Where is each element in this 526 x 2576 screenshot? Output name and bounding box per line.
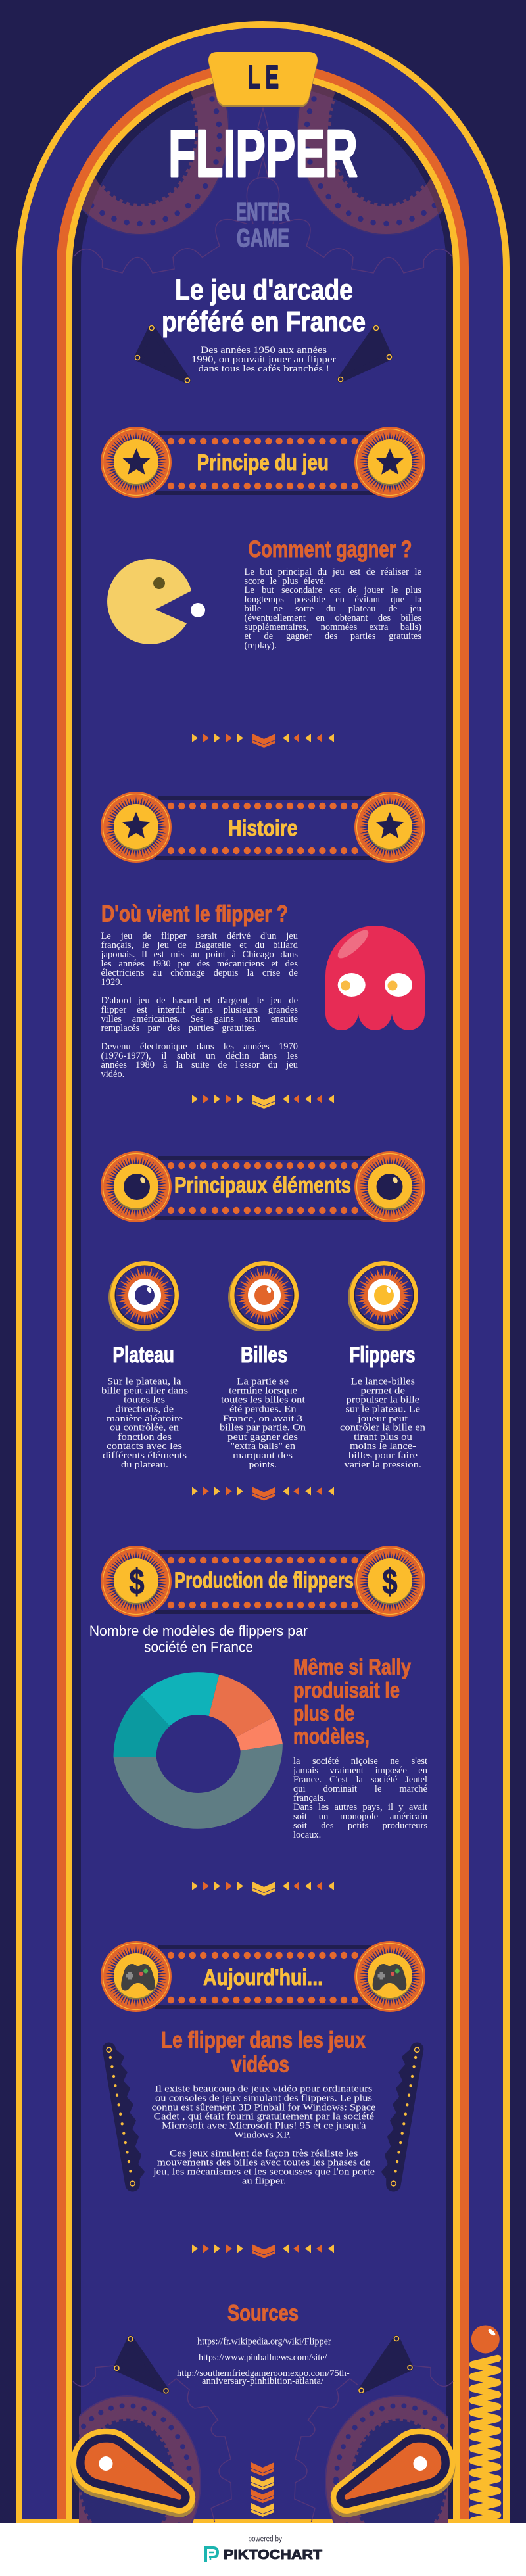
text: Billes: billes par partie. On [220, 1423, 306, 1433]
text: Comment gagner: Le but secondaire est de jouer le plus [245, 585, 421, 596]
text: Comment gagner: bille ne sorte du plateau de jeu [245, 604, 421, 614]
bottom chevrons [251, 2462, 274, 2517]
text: Rally: soit un monopole américain [293, 1811, 427, 1822]
text: Flippers: sur le plateau. Le [346, 1404, 420, 1415]
heading: Le flipper dans les jeux vidéos: vidéos [231, 2052, 289, 2078]
icon: dollar right: $ [383, 1562, 397, 1602]
text: Flippers: Le lance-billes [351, 1377, 415, 1387]
text: Billes: "extra balls" en [230, 1441, 296, 1452]
icon: pacman [107, 559, 205, 644]
text: Billes: toutes les billes ont [221, 1395, 305, 1406]
text: Plateau: directions, de [116, 1404, 174, 1415]
enter game label: GAME [237, 224, 289, 252]
heading: Même si Rally [293, 1655, 412, 1748]
footer background [0, 2523, 526, 2576]
text: D'où vient le flipper: les années 1930 par des mécaniciens et des [101, 959, 298, 969]
divider 4 [192, 1882, 334, 1896]
plaque: LE: L E [248, 60, 279, 95]
heading: Le flipper dans les jeux vidéos [161, 2027, 366, 2078]
bottom gear decoration [72, 2365, 454, 2523]
banner: Principe du jeu [101, 427, 425, 498]
text: Flippers: varier la pression. [345, 1460, 421, 1470]
chart title [89, 1623, 308, 1656]
subtitle: Le jeu d'arcade [175, 274, 353, 306]
text: Plateau: toutes les [124, 1395, 165, 1406]
heading: Comment gagner: Comment gagner ? [249, 537, 412, 562]
text: Billes: France, on avait 3 [223, 1414, 302, 1424]
text: D'où vient le flipper: remplacés par des parties gratuites. [101, 1023, 257, 1034]
banner title: Principaux éléments [174, 1173, 351, 1198]
donut chart [113, 1672, 283, 1829]
text: Rally [293, 1756, 427, 1840]
heading: Même si Rally: plus de [293, 1701, 354, 1725]
text: Flippers: moins le lance- [350, 1441, 416, 1452]
bumper: top right [338, 326, 392, 381]
text: Flippers: tirant plus ou [354, 1432, 412, 1443]
bumper: bottom right [359, 2337, 412, 2393]
banner title: Principe du jeu [197, 450, 329, 475]
text: Rally: soit des petits producteurs [293, 1821, 427, 1831]
source links [177, 2337, 350, 2387]
text: D'où vient le flipper: 1929. [101, 977, 122, 988]
text: Plateau: différents éléments [103, 1450, 187, 1461]
heading: Sources: Sources [227, 2301, 299, 2326]
text: Billes: marquant des [233, 1450, 293, 1461]
text: D'où vient le flipper: années 1980 à la suite de l'essor du jeu [101, 1060, 298, 1070]
text: jeux vidéo: Ces jeux simulent de façon très réaliste les [170, 2149, 358, 2159]
text: Rally: France. C'est la société Jeutel [293, 1775, 427, 1785]
text: Comment gagner: longtemps possible en évitant que la [245, 594, 421, 605]
text: Rally: français. [293, 1793, 326, 1803]
text: Plateau: fonction des [118, 1432, 172, 1443]
intro text: 1990, on pouvait jouer au flipper [191, 354, 336, 365]
banner title: Production de flippers [174, 1568, 354, 1593]
text: Billes: points. [249, 1460, 277, 1470]
source links: anniversary-pinhibition-atlanta/ [202, 2376, 324, 2387]
text: Plateau: du plateau. [121, 1460, 168, 1470]
source links: https://www.pinballnews.com/site/ [199, 2352, 327, 2363]
logo: piktochart: PIKTOCHART [224, 2547, 323, 2562]
text: Billes: La partie se [237, 1377, 289, 1387]
text: Plateau: contacts avec les [107, 1441, 182, 1452]
text: D'où vient le flipper: électriciens au chômage depuis la crise de [101, 968, 298, 978]
powered by: powered by [249, 2534, 282, 2544]
heading: Même si Rally: produisait le [293, 1678, 400, 1702]
divider 1 [192, 734, 334, 748]
text: Rally: locaux. [293, 1830, 321, 1840]
text: jeux vidéo: Il existe beaucoup de jeux vidéo pour ordinateurs [155, 2084, 373, 2095]
chart title: société en France [144, 1639, 253, 1656]
heading: Même si Rally: Même si Rally [293, 1655, 412, 1679]
text: Rally: Dans les autres pays, il y avait [293, 1802, 427, 1813]
plunger spring [473, 2358, 498, 2521]
text: Rally: la société niçoise ne s'est [293, 1756, 427, 1767]
text: Comment gagner [245, 567, 421, 651]
icon: star right [376, 812, 404, 838]
text: jeux vidéo: mouvements des billes avec toutes les phases de [157, 2158, 370, 2168]
text: Flippers [340, 1377, 426, 1470]
banner title: Histoire [228, 816, 297, 841]
text: Flippers: propulser la bille [346, 1395, 419, 1406]
text: D'où vient le flipper [101, 931, 298, 1080]
heading: D'où vient le flipper: D'où vient le flipper ? [101, 901, 288, 927]
medallion: Plateau [108, 1261, 179, 1331]
icon: ball left [124, 1174, 150, 1200]
divider 2 [192, 1095, 334, 1109]
enter game label: ENTER [236, 198, 290, 226]
text: D'où vient le flipper: Le jeu de flipper serait dérivé d'un jeu [101, 931, 298, 942]
text: Comment gagner: supplémentaires, nommées extra balls) [245, 622, 421, 632]
text: Comment gagner: (replay). [245, 640, 277, 651]
text: Plateau: manière aléatoire [107, 1414, 183, 1424]
banner: Histoire [101, 792, 425, 863]
source links: https://fr.wikipedia.org/wiki/Flipper [197, 2337, 331, 2347]
text: Billes: peut gagner des [227, 1432, 298, 1443]
text: jeux vidéo: Cadet , qui était fourni gratuitement par la société [154, 2112, 374, 2122]
text: Plateau: bille peut aller dans [101, 1386, 188, 1396]
icon: star left [123, 448, 150, 475]
text: Billes [220, 1377, 306, 1470]
plaque: LE [208, 52, 318, 107]
intro text: Des années 1950 aux années [201, 345, 327, 356]
icon: star right [376, 448, 404, 475]
heading: Plateau: Plateau [112, 1343, 174, 1368]
bumper: bottom left [114, 2337, 168, 2393]
icon: gamepad left [121, 1964, 155, 1991]
rail: right [381, 2043, 423, 2192]
icon: dollar left: $ [129, 1562, 145, 1602]
heading: Même si Rally: modèles, [293, 1724, 370, 1748]
text: D'où vient le flipper: (1976-1977), il subit un déclin dans les [101, 1051, 298, 1061]
top gear decoration [74, 84, 452, 274]
divider 5 [192, 2245, 334, 2258]
rail: left [103, 2043, 145, 2192]
text: jeux vidéo: Microsoft avec Microsoft Plus! 95 et ce jusqu'à [162, 2121, 366, 2132]
heading: Flippers: Flippers [350, 1343, 416, 1368]
chart title: Nombre de modèles de flippers par [89, 1623, 308, 1639]
text: Comment gagner: (éventuellement en obtenant des billes [245, 613, 421, 623]
text: D'où vient le flipper: français, le jeu de Bagatelle et du billard [101, 940, 298, 951]
plunger ball [471, 2325, 500, 2354]
bumper: top left [135, 326, 189, 383]
text: Flippers: joueur peut [357, 1414, 408, 1424]
heading: Le flipper dans les jeux vidéos: Le flipper dans les jeux [161, 2027, 366, 2053]
text: Plateau [101, 1377, 188, 1470]
text: D'où vient le flipper: flipper est interdit dans plusieurs grandes [101, 1005, 298, 1015]
title: FLIPPER: FLIPPER [168, 117, 358, 191]
text: Billes: été perdues. En [229, 1404, 297, 1415]
text: Plateau: Sur le plateau, la [107, 1377, 181, 1387]
medallion: Billes [228, 1261, 299, 1331]
icon: ghost [325, 926, 425, 1030]
intro text: dans tous les cafés branchés ! [199, 364, 329, 374]
banner: Aujourd'hui [101, 1941, 425, 2012]
text: jeux vidéo: connu est sûrement 3D Pinball for Windows: Space [152, 2103, 375, 2113]
text: jeux vidéo: ou consoles de jeux simulant des flippers. Le plus [155, 2093, 372, 2104]
text: D'où vient le flipper: Devenu électronique dans les années 1970 [101, 1041, 298, 1052]
medallion: Flippers [348, 1261, 418, 1331]
text: Flippers: permet de [360, 1386, 405, 1396]
text: Rally: jamais vraiment imposée en [293, 1765, 427, 1776]
text: Flippers: billes pour faire [348, 1450, 418, 1461]
text: Billes: termine lorsque [229, 1386, 297, 1396]
text: jeux vidéo [152, 2084, 375, 2187]
heading: Billes: Billes [241, 1343, 287, 1368]
banner: Principaux éléments [101, 1151, 425, 1222]
icon: gamepad right [373, 1964, 406, 1991]
intro text [191, 345, 336, 374]
text: D'où vient le flipper: vidéo. [101, 1069, 124, 1080]
enter game label [236, 198, 290, 252]
divider 3 [192, 1487, 334, 1500]
flipper: left [85, 2443, 181, 2504]
source links: http://southernfriedgameroomexpo.com/75th- [177, 2368, 350, 2379]
banner: Production de flippers [101, 1546, 425, 1617]
text: Flippers: contrôler la bille en [340, 1423, 426, 1433]
banner title: Aujourd'hui... [203, 1965, 323, 1990]
subtitle: préféré en France [162, 306, 366, 338]
text: Comment gagner: et de gagner des parties gratuites [245, 631, 421, 642]
text: jeux vidéo: Windows XP. [234, 2130, 291, 2141]
subtitle [162, 274, 366, 338]
icon: ball right [376, 1174, 402, 1200]
text: D'où vient le flipper: D'abord jeu de hasard et d'argent, le jeu de [101, 995, 298, 1006]
text: D'où vient le flipper: japonais. Il est mis au point à Chicago dans [101, 949, 298, 960]
text: Comment gagner: score le plus élevé. [245, 576, 326, 586]
text: jeux vidéo: jeu, les mécanismes et les secousses que l'on porte [153, 2167, 375, 2178]
text: Rally: qui dominait le marché [293, 1784, 427, 1794]
flipper: right [345, 2443, 441, 2504]
text: D'où vient le flipper: villes américaines. Ses gains sont ensuite [101, 1014, 298, 1024]
text: Comment gagner: Le but principal du jeu est de réaliser le [245, 567, 421, 577]
text: jeux vidéo: au flipper. [242, 2176, 286, 2187]
icon: star left [122, 812, 150, 838]
text: Plateau: ou contrôlée, en [110, 1423, 179, 1433]
